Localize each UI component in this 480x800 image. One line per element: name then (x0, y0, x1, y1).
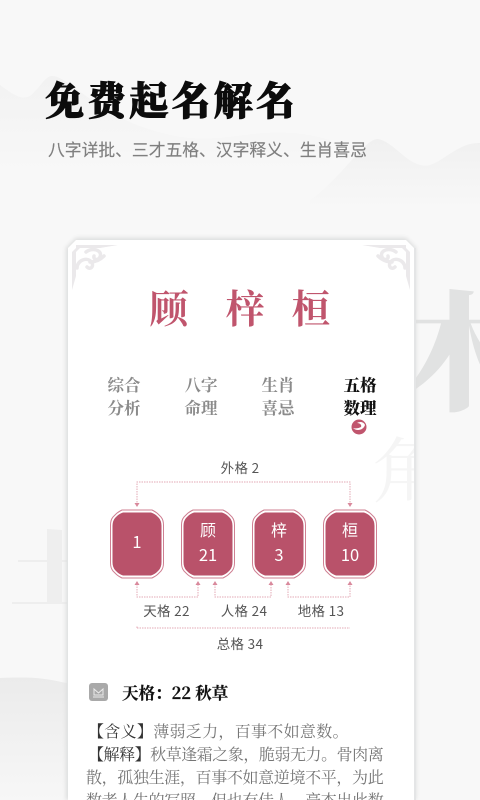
body text: 【含义】薄弱乏力，百事不如意数。 (88, 723, 349, 741)
card shadow (66, 238, 416, 800)
tab: 五格数理 active (344, 375, 377, 418)
label: 地格: 地格 13 (298, 600, 344, 620)
label: 天格: 天格 22 (143, 600, 190, 620)
background glyph: 角: 角 (372, 414, 444, 518)
box 梓 3: 梓 (271, 517, 287, 541)
label: 外格: 外格 2 (221, 457, 259, 477)
icon: active tab swirl (352, 420, 366, 434)
body text (86, 723, 384, 800)
tab: 五格数理 active: 数理 (344, 398, 377, 418)
title: 免费起名解名 (45, 71, 298, 127)
section heading: 天格：22 秋草 (122, 680, 229, 704)
tab: 生肖喜忌: 生肖 (262, 376, 294, 395)
name heading: 梓 (225, 289, 265, 332)
box 梓 3 (252, 510, 306, 578)
box 顾 21: 21 (199, 542, 217, 566)
tab: 综合分析: 综合 (108, 375, 141, 395)
tab: 八字命理 (184, 376, 218, 418)
subtitle: 八字详批、三才五格、汉字释义、生肖喜忌 (48, 137, 367, 161)
label: 人格: 人格 24 (221, 600, 267, 620)
body text: 【解释】秋草逢霜之象，脆弱无力。骨肉离 (88, 745, 384, 764)
corner ornament right (362, 245, 410, 290)
icon: section badge (89, 683, 108, 701)
tab: 八字命理: 命理 (184, 398, 218, 418)
name heading: 桓 (291, 289, 331, 332)
tab: 综合分析 (108, 375, 141, 418)
box 桓 10: 桓 (342, 517, 358, 541)
body text: 散，孤独生涯，百事不如意逆境不平，为此 (86, 769, 384, 787)
box 1 (110, 510, 164, 578)
name heading: 顾 (149, 289, 190, 332)
tab: 八字命理: 八字 (184, 376, 218, 395)
box 顾 21: 顾 (200, 517, 216, 541)
name heading (149, 289, 331, 332)
tab: 生肖喜忌: 喜忌 (262, 398, 296, 418)
tab: 五格数理 active: 五格 (344, 375, 377, 395)
box 1: 1 (132, 529, 142, 553)
box 桓 10 (324, 510, 376, 578)
box 桓 10: 10 (341, 542, 359, 566)
corner ornament left (72, 245, 118, 290)
tab: 生肖喜忌 (262, 376, 296, 418)
box 顾 21 (182, 510, 234, 578)
background glyph: 土 (12, 529, 67, 604)
box 梓 3: 3 (274, 542, 284, 566)
card (68, 240, 444, 800)
connector: 外格 (134, 482, 352, 507)
connectors: lower brackets (134, 581, 352, 628)
label: 总格: 总格 34 (217, 633, 263, 653)
tab: 综合分析: 分析 (108, 398, 141, 418)
